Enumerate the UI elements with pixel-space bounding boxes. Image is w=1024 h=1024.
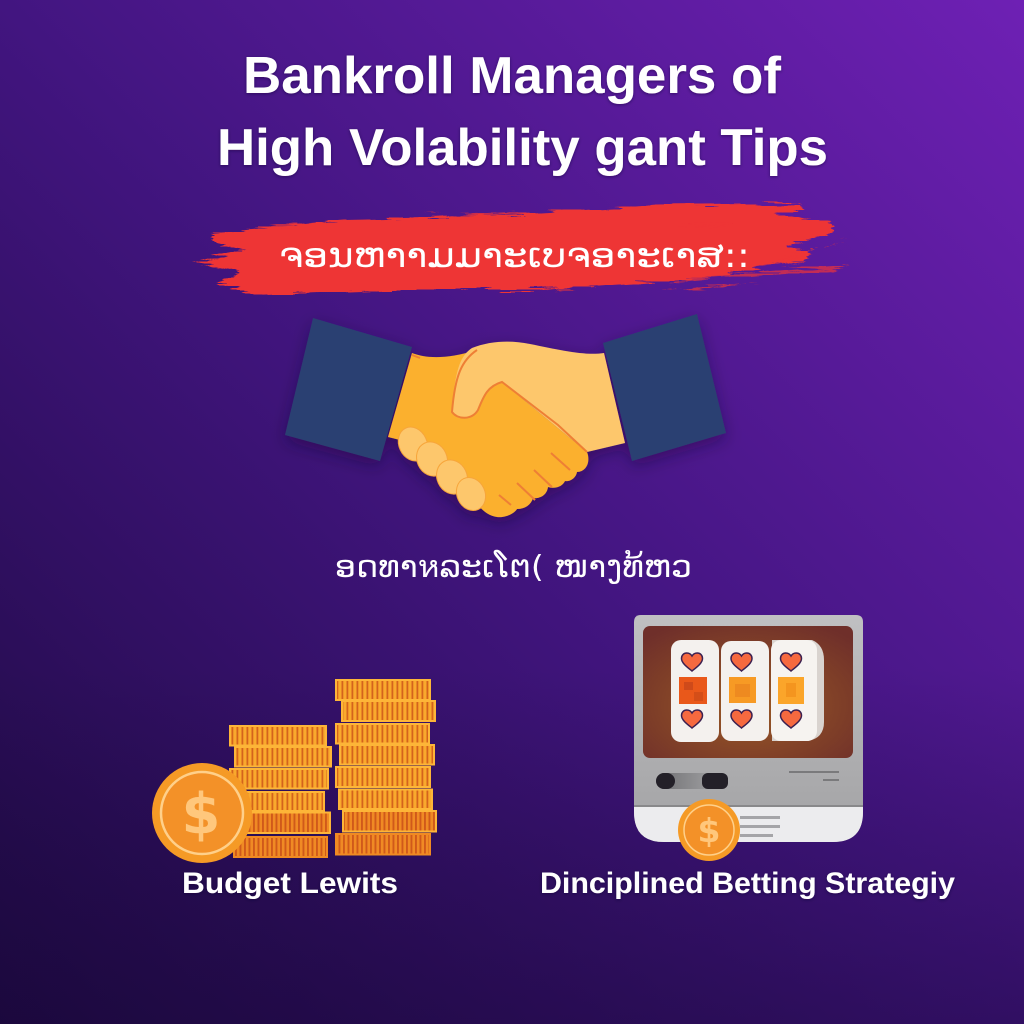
label: betting strategy: Dinciplined Betting Strategiy [540,867,955,900]
left cuff [285,318,412,461]
icon: coin stacks [152,680,436,863]
right hand [452,342,625,452]
label: budget: Budget Lewits [182,867,398,900]
screen [643,626,853,758]
tray lines [740,816,780,837]
banner: red brush stroke with subtitle: ຈອນຫາາມມາະເບຈອາະເາສ:: [279,236,750,276]
machine body [634,615,863,842]
lower panel [634,807,863,842]
panel seam [634,805,863,807]
reels [671,640,824,742]
banner: red brush stroke with subtitle [193,204,850,295]
light fingers [393,422,491,515]
caption under handshake: ອດທາหລະເໂຕ( ໜາງທ້ຫວ [335,549,692,585]
large dollar coin: $ [182,782,220,847]
small dollar coin [678,799,740,861]
small print lines [789,771,839,781]
hand outline [412,350,587,452]
slider control [656,773,728,789]
title [217,47,828,177]
left stack [230,726,331,857]
icon: slot machine [634,615,863,861]
icon: handshake [285,314,726,517]
right stack [336,680,436,854]
title: High Volability gant Tips [217,119,828,177]
title: Bankroll Managers of [243,47,782,105]
left hand [388,350,588,517]
small dollar coin: $ [698,811,720,850]
large dollar coin [152,763,252,863]
finger creases [499,453,570,505]
right cuff [603,314,726,461]
